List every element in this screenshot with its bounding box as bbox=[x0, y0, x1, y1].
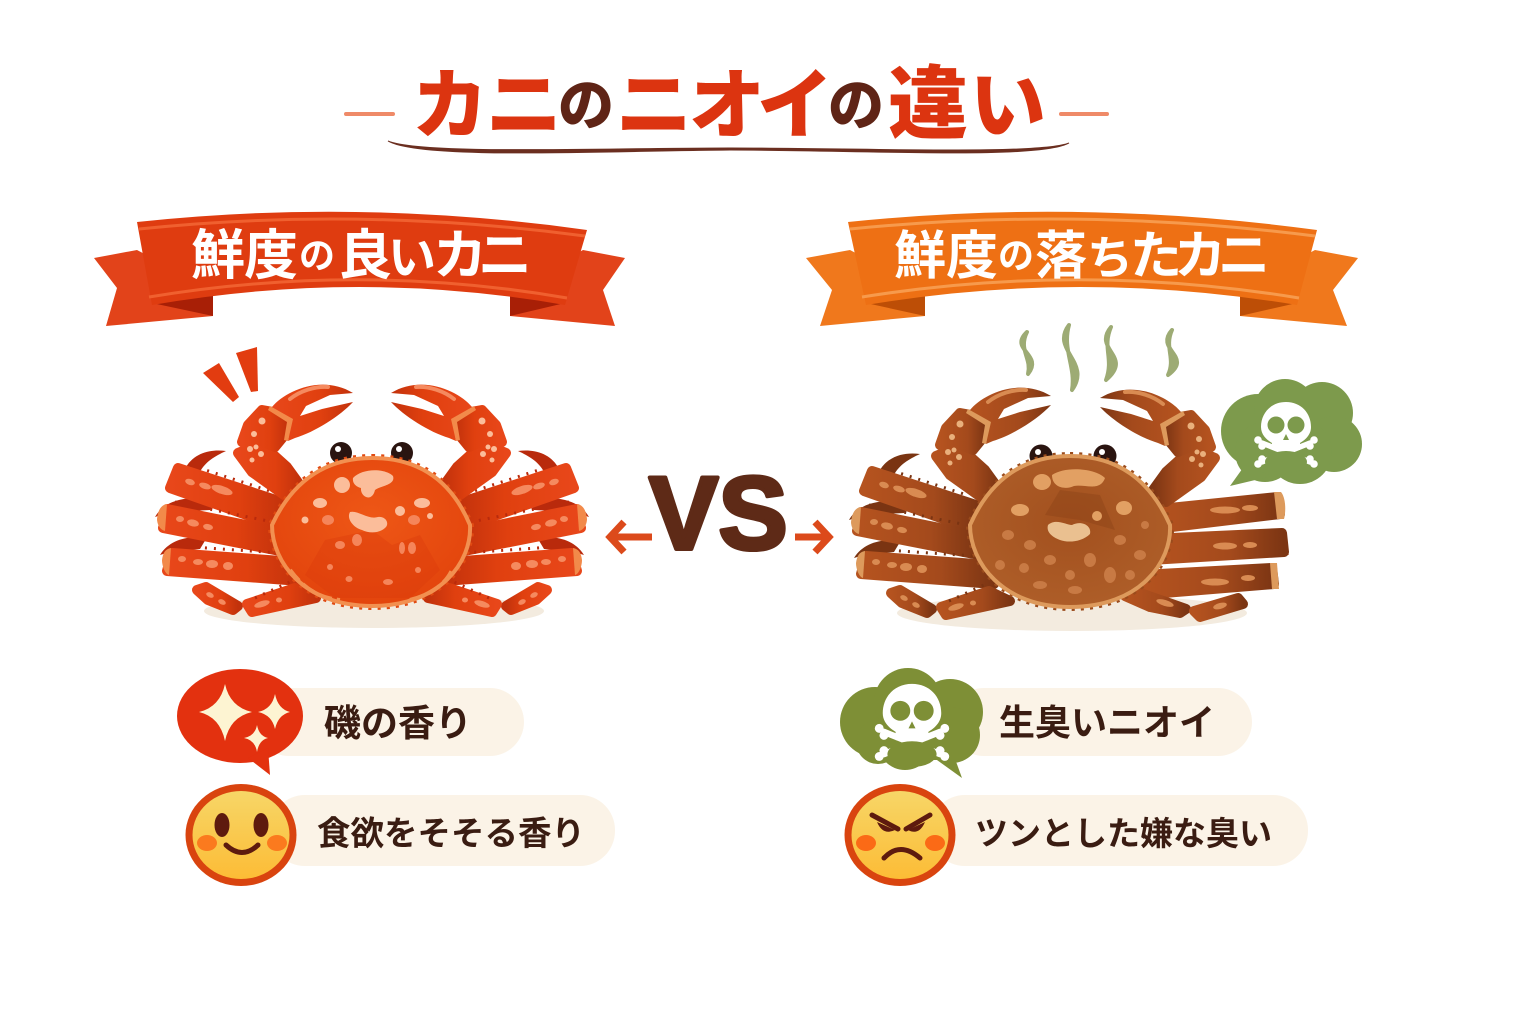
icon: stink cloud with skull bbox=[1221, 379, 1362, 486]
vs text: VS bbox=[649, 456, 788, 572]
label: 磯の香り bbox=[324, 703, 472, 744]
ribbon text: 度 bbox=[946, 228, 998, 286]
crab: fresh bbox=[155, 385, 589, 628]
crab legs left bbox=[849, 453, 1010, 615]
title text: ニ bbox=[616, 64, 692, 149]
ribbon text: 落 bbox=[1035, 228, 1087, 286]
title text: カ bbox=[412, 64, 488, 149]
ribbon text: 良 bbox=[338, 226, 392, 286]
ribbon text: た bbox=[1130, 228, 1182, 286]
icon: smiling face bbox=[186, 784, 296, 886]
crab carapace bbox=[272, 458, 470, 606]
crab claw left bbox=[238, 385, 353, 497]
crab eyes bbox=[1030, 444, 1116, 468]
vs badge bbox=[610, 456, 829, 572]
title underline bbox=[388, 141, 1069, 153]
ribbon text: 度 bbox=[244, 226, 298, 286]
icon: angry face bbox=[844, 784, 956, 886]
ribbon: fresh bbox=[94, 212, 625, 326]
title text: オ bbox=[689, 64, 765, 149]
ribbon text: カ bbox=[433, 226, 487, 286]
ribbon text: い bbox=[388, 232, 436, 285]
title text: の bbox=[828, 74, 884, 137]
ribbon text: の bbox=[998, 235, 1034, 276]
label: ツンとした嫌な臭い bbox=[975, 815, 1272, 852]
scent item: appetite bbox=[186, 784, 615, 886]
title text: の bbox=[558, 74, 614, 137]
scent item: raw smell bbox=[840, 668, 1252, 778]
crab claw left bbox=[936, 388, 1051, 500]
crab legs left bbox=[155, 450, 316, 612]
title bbox=[346, 60, 1107, 153]
title text: 違 bbox=[888, 60, 968, 149]
ribbon text: ニ bbox=[478, 226, 532, 286]
title text: ニ bbox=[486, 64, 562, 149]
label: 生臭いニオイ bbox=[999, 702, 1215, 743]
crab eyes bbox=[330, 442, 413, 464]
crab shadow bbox=[897, 595, 1247, 631]
title right dash bbox=[1061, 112, 1107, 116]
label: 食欲をそそる香り bbox=[317, 816, 585, 853]
crab legs right bbox=[428, 450, 589, 612]
pill bbox=[950, 688, 1252, 756]
crab claw right bbox=[1100, 390, 1215, 502]
icon: skull cloud bbox=[840, 668, 983, 778]
crab carapace bbox=[970, 456, 1170, 607]
ribbon text: カ bbox=[1174, 228, 1226, 286]
arrow right bbox=[795, 522, 829, 552]
ribbon text: 鮮 bbox=[894, 228, 946, 286]
crab legs right bbox=[1125, 492, 1289, 617]
scent item: pungent smell bbox=[844, 784, 1308, 886]
crab shadow bbox=[204, 594, 544, 628]
panel: stale crab bbox=[806, 212, 1362, 886]
ribbon: stale bbox=[806, 212, 1358, 326]
title text: イ bbox=[757, 64, 833, 149]
icon: sparkle bubble bbox=[177, 669, 303, 775]
arrow left bbox=[610, 522, 652, 552]
crab claw right bbox=[391, 385, 506, 497]
crab: stale bbox=[849, 388, 1289, 631]
scent item: iso bbox=[177, 669, 524, 775]
title left dash bbox=[346, 112, 393, 116]
title text: い bbox=[970, 64, 1046, 149]
pill bbox=[255, 688, 524, 756]
ribbon text: ち bbox=[1087, 232, 1133, 284]
steam bbox=[1021, 325, 1177, 390]
ribbon text: の bbox=[299, 235, 335, 276]
ribbon text: 鮮 bbox=[191, 226, 245, 286]
pill bbox=[930, 795, 1308, 866]
pill bbox=[270, 795, 615, 866]
panel: fresh crab bbox=[94, 212, 625, 886]
ribbon text: ニ bbox=[1218, 228, 1270, 286]
impact marks bbox=[203, 347, 258, 402]
